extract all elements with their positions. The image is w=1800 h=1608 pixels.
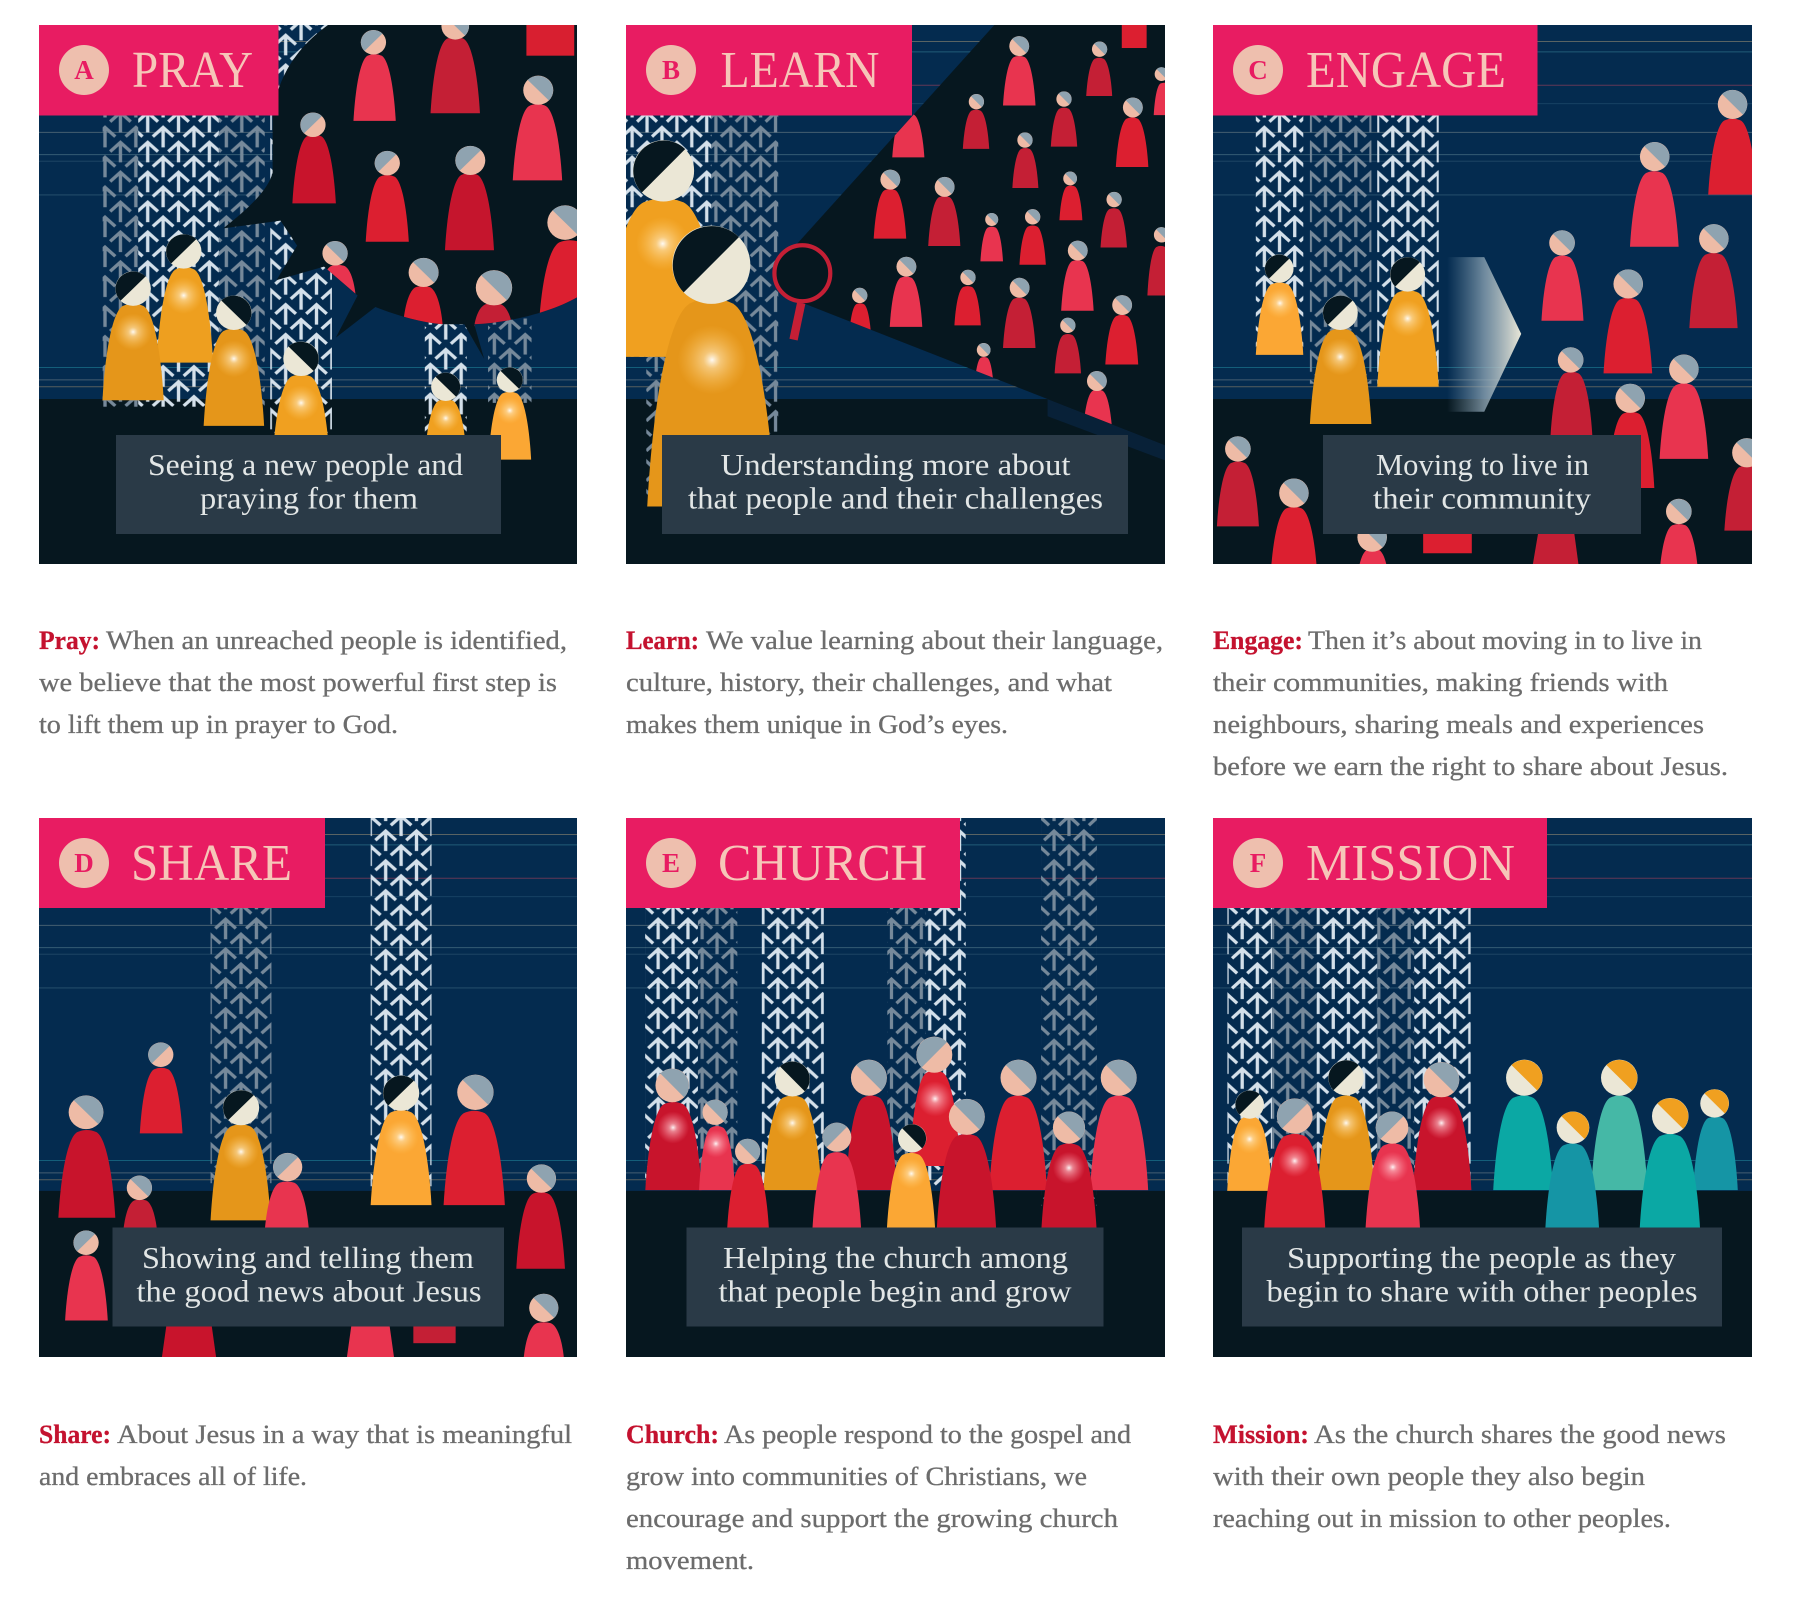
caption: share: the good news about Jesus [136,1274,482,1308]
tag: A PRAY: PRAY [132,42,253,98]
tag: E CHURCH: E [662,848,680,878]
red people in bubble [292,25,577,326]
text block: Engage: before we earn the right to share about Jesus. [1212,751,1728,781]
caption: engage: Moving to live in [1376,448,1589,482]
text block: Pray [39,625,567,739]
panel: F Mission illustration [1213,818,1752,1357]
caption: church: Helping the church among [723,1241,1068,1275]
speech bubble [223,24,577,358]
text block: Church: grow into communities of Christians, we [626,1460,1087,1490]
text block: Learn: We value learning about their language, [706,625,1163,655]
scene: mission [1213,818,1752,1357]
tag: F MISSION: MISSION [1306,835,1515,892]
icon: magnifying glass [774,245,830,339]
text block: Pray: to lift them up in prayer to God. [39,709,398,739]
magnifier beam [795,24,1165,445]
arrow columns [211,818,432,1186]
caption: learn: Understanding more about [720,448,1071,482]
caption: share [112,1228,504,1326]
tag: A PRAY [39,24,278,115]
tag: F MISSION [1213,818,1547,908]
scene: share [39,818,577,1357]
text block: Share: and embraces all of life. [39,1460,307,1490]
caption: learn [662,434,1128,534]
tag: D SHARE: SHARE [131,835,292,892]
text block: Mission: Mission: [1212,1418,1308,1448]
text block: Engage: Engage: [1212,625,1302,655]
scene: pray [39,25,577,564]
text block: Engage [1212,625,1728,781]
panel: B Learn illustration [626,25,1165,564]
text block: Church: As people respond to the gospel and [724,1418,1131,1448]
panel: E Church illustration [626,818,1165,1357]
tag: F MISSION: F [1250,848,1266,878]
text block: Church: encourage and support the growing church [626,1502,1118,1532]
caption: mission: Supporting the people as they [1287,1241,1677,1275]
caption: learn: that people and their challenges [688,481,1103,515]
arrow columns [1256,115,1439,383]
back row people [645,1037,1148,1190]
tag: B LEARN: LEARN [720,42,880,98]
red people [1217,89,1770,575]
text block: Learn: Learn: [626,625,699,655]
text block: Share: Share: [39,1418,111,1448]
text block: Engage: Then it’s about moving in to live in [1308,625,1701,655]
text block: Church: Church: [626,1418,719,1448]
yellow people [211,1075,432,1220]
tag: A PRAY: A [74,54,94,84]
caption: mission: begin to share with other peoples [1266,1274,1698,1308]
yellow praying people [102,234,531,459]
text block: Learn: makes them unique in God’s eyes. [626,709,1008,739]
panel: D Share illustration [39,818,577,1357]
caption: pray: Seeing a new people and [148,448,463,482]
red people in beam [849,24,1174,431]
arrow: move right [1447,257,1521,411]
arrow columns [626,115,778,506]
tag: C ENGAGE: ENGAGE [1306,42,1506,98]
text block: Pray: Pray: [39,625,100,655]
believers [1227,1060,1471,1228]
scene: engage [1213,25,1752,564]
text block: Engage: neighbours, sharing meals and experiences [1212,709,1703,739]
scene: church [626,818,1165,1357]
tag: D SHARE: D [74,848,94,878]
text block: Mission [1212,1418,1726,1533]
arrow columns [645,818,1097,1205]
scene: learn [626,25,1165,564]
text block: Church [626,1418,1131,1574]
arrow columns [1227,907,1471,1183]
tag: B LEARN [626,24,912,115]
yellow people [604,140,775,506]
tag: B LEARN: B [662,54,680,84]
text block: Share [39,1418,572,1490]
text block: Church: movement. [626,1544,754,1574]
panel: A Pray illustration [39,25,577,564]
caption: engage: their community [1373,481,1592,515]
caption: share: Showing and telling them [142,1241,474,1275]
text block: Engage: their communities, making friends with [1212,667,1668,697]
caption: church: that people begin and grow [718,1274,1072,1308]
text block: Mission: with their own people they also begin [1212,1460,1644,1490]
teal new peoples [1493,1060,1738,1228]
text block: Share: About Jesus in a way that is meaningful [117,1418,572,1448]
tag: D SHARE [39,818,325,908]
caption: pray [116,434,501,534]
text block: Learn [626,625,1163,739]
tag: E CHURCH [626,818,960,908]
text block: Pray: we believe that the most powerful first step is [39,667,557,697]
front row people [727,1099,1097,1228]
caption: pray: praying for them [200,481,418,515]
text block: Pray: When an unreached people is identified, [106,625,567,655]
text block: Mission: reaching out in mission to other peoples. [1212,1502,1670,1532]
arrow columns [103,23,532,437]
tag: C ENGAGE [1213,24,1538,115]
yellow people [1256,254,1439,423]
panel: C Engage illustration [1213,25,1752,564]
caption: mission [1242,1228,1722,1326]
tag: E CHURCH: CHURCH [718,835,927,892]
caption: church [686,1228,1104,1326]
caption: engage [1323,434,1641,534]
tag: C ENGAGE: C [1248,54,1268,84]
text block: Mission: As the church shares the good news [1314,1418,1726,1448]
text block: Learn: culture, history, their challenges, and what [626,667,1113,697]
red people [58,1042,565,1359]
